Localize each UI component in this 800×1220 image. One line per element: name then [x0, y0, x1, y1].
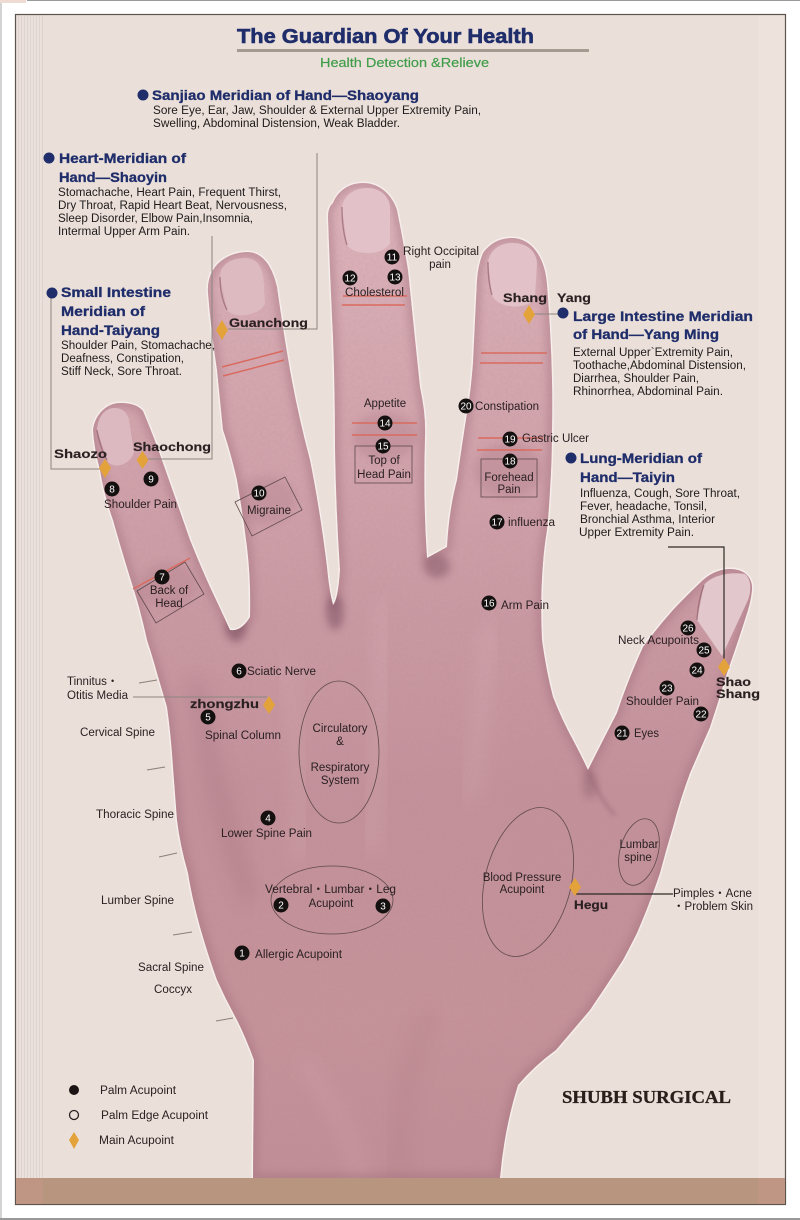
- numbered acupoints: 9: [148, 474, 154, 486]
- panel: Sanjiao meridian: [138, 87, 481, 130]
- numbered acupoints: 13: [389, 272, 401, 284]
- numbered acupoints: 18: [504, 456, 516, 468]
- acupoint labels on the hand: pain: [429, 259, 451, 271]
- spine labels: Thoracic Spine: [96, 809, 174, 821]
- panel: Small Intestine meridian: Shoulder Pain, Stomachache,: [61, 340, 215, 352]
- panel: Sanjiao meridian: Swelling, Abdominal Distension, Weak Bladder.: [153, 118, 400, 130]
- numbered acupoints: 2: [278, 900, 284, 912]
- numbered acupoints: 7: [159, 572, 165, 584]
- panel: Heart meridian: [44, 150, 287, 238]
- numbered acupoints: 4: [265, 814, 271, 824]
- panel: Small Intestine meridian: Meridian of: [61, 303, 145, 319]
- acupoint labels on the hand: spine: [624, 852, 652, 864]
- main acupoint diamonds and names: Shaozo: [54, 449, 107, 461]
- acupoint labels on the hand: Blood Pressure: [483, 872, 561, 884]
- palm highlights: [285, 660, 300, 860]
- acupoint labels on the hand: Lower Spine Pain: [221, 828, 312, 840]
- acupoint labels on the hand: Forehead: [484, 472, 534, 484]
- acupoint labels on the hand: Sciatic Nerve: [247, 666, 316, 678]
- acupoint labels on the hand: Vertebral・Lumbar・Leg: [265, 884, 396, 896]
- panel: Large Intestine meridian: Diarrhea, Shoulder Pain,: [573, 373, 699, 385]
- acupoint labels on the hand: Circulatory: [313, 723, 368, 735]
- main acupoint diamonds and names: Shaochong: [133, 442, 211, 454]
- panel: Small Intestine meridian: Deafness, Constipation,: [61, 353, 184, 365]
- brand name: SHUBH SURGICAL: [562, 1087, 731, 1107]
- panel: Small Intestine meridian: [46, 284, 215, 378]
- numbered acupoints: 16: [483, 598, 495, 610]
- numbered acupoints: 21: [616, 728, 628, 740]
- acupoint labels on the hand: System: [321, 775, 359, 787]
- spine labels: Tinnitus・: [67, 676, 118, 688]
- knuckle wrinkles: [353, 412, 417, 460]
- panel: Large Intestine meridian: of Hand—Yang Ming: [573, 326, 719, 342]
- legend: Palm Edge Acupoint: [101, 1110, 209, 1122]
- main acupoint diamonds and names: [54, 293, 760, 912]
- leader lines: [51, 153, 724, 894]
- panel: Lung meridian: Lung-Meridian of: [580, 450, 702, 466]
- acupoint labels on the hand: Acupoint: [309, 898, 354, 910]
- panel: Lung meridian: Influenza, Cough, Sore Throat,: [580, 488, 740, 500]
- numbered acupoints: 14: [379, 418, 391, 430]
- panel: Small Intestine meridian: Stiff Neck, Sore Throat.: [61, 366, 182, 378]
- acupoint labels on the hand: Constipation: [475, 401, 539, 413]
- numbered acupoints: 26: [682, 624, 694, 634]
- numbered acupoints: 1: [239, 948, 245, 960]
- acupoint labels on the hand: Eyes: [634, 728, 659, 740]
- spine tick marks: [139, 680, 233, 1021]
- acupoint labels on the hand: Shoulder Pain: [626, 696, 699, 708]
- panel: Large Intestine meridian: Rhinorrhea, Abdominal Pain.: [573, 386, 723, 398]
- acupoint labels on the hand: Gastric Ulcer: [522, 433, 589, 445]
- numbered acupoints: 25: [698, 646, 710, 656]
- acupoint labels on the hand: &: [336, 736, 344, 748]
- acupoint labels on the hand: Head Pain: [357, 469, 411, 481]
- main acupoint diamonds and names: Shang: [503, 293, 547, 305]
- numbered acupoints: 6: [236, 666, 242, 678]
- acupoint labels on the hand: ・Problem Skin: [673, 901, 753, 913]
- numbered acupoints: 12: [344, 274, 356, 284]
- numbered acupoints: [104, 250, 712, 960]
- main acupoint diamonds and names: zhongzhu: [190, 699, 259, 711]
- panel: Small Intestine meridian: Hand-Taiyang: [61, 322, 160, 338]
- acupoint labels on the hand: Pain: [497, 484, 521, 496]
- acupoint labels on the hand: Back of: [150, 585, 189, 597]
- spine labels: Lumber Spine: [101, 895, 174, 907]
- main acupoint diamonds and names: Shao: [716, 677, 751, 689]
- acupoint labels on the hand: Lumbar: [620, 839, 659, 851]
- spine labels: Coccyx: [154, 984, 192, 996]
- numbered acupoints: 3: [380, 902, 386, 912]
- title: [237, 26, 589, 70]
- panel: Lung meridian: [566, 450, 740, 539]
- numbered acupoints: 10: [253, 488, 265, 500]
- panel: Heart meridian: Heart-Meridian of: [59, 150, 186, 166]
- panel: Heart meridian: Hand—Shaoyin: [59, 169, 167, 185]
- legend: [69, 1085, 209, 1149]
- panel: Heart meridian: Dry Throat, Rapid Heart Beat, Nervousness,: [58, 200, 287, 212]
- fingernails: [97, 188, 750, 656]
- panel: Heart meridian: Stomachache, Heart Pain, Frequent Thirst,: [58, 187, 281, 199]
- web shadows: [226, 614, 246, 642]
- acupoint labels on the hand: Neck Acupoints: [618, 635, 699, 647]
- spine labels: [67, 676, 204, 996]
- acupoint labels on the hand: Spinal Column: [205, 730, 281, 742]
- panel: Large Intestine meridian: External Upper`Extremity Pain,: [573, 347, 733, 359]
- panel: Small Intestine meridian: Small Intestine: [61, 284, 171, 300]
- numbered acupoints: 15: [377, 442, 389, 452]
- panel: Large Intestine meridian: Toothache,Abdominal Distension,: [573, 360, 746, 372]
- numbered acupoints: 23: [661, 684, 673, 694]
- edge shading: [93, 183, 752, 1178]
- acupoint labels on the hand: [104, 246, 753, 961]
- panel: Heart meridian: Intermal Upper Arm Pain.: [58, 226, 190, 238]
- numbered acupoints: 22: [695, 710, 707, 720]
- numbered acupoints: 20: [460, 402, 472, 412]
- acupoint labels on the hand: Arm Pain: [501, 600, 549, 612]
- acupoint labels on the hand: Appetite: [364, 398, 406, 410]
- panel: Large Intestine meridian: Large Intestine Meridian: [573, 308, 753, 324]
- acupoint labels on the hand: Head: [155, 598, 183, 610]
- bottom band: [16, 1178, 785, 1204]
- panel: Large Intestine meridian: [558, 308, 753, 398]
- subtitle: Health Detection &Relieve: [320, 55, 489, 70]
- panel: Sanjiao meridian: Sore Eye, Ear, Jaw, Shoulder & External Upper Extremity Pain,: [153, 105, 481, 117]
- acupoint labels on the hand: Pimples・Acne: [673, 888, 752, 900]
- main acupoint diamonds and names: Guanchong: [229, 318, 308, 330]
- panel: Lung meridian: Bronchial Asthma, Interior: [580, 514, 715, 526]
- acupoint labels on the hand: Acupoint: [500, 884, 545, 896]
- numbered acupoints: 24: [691, 666, 703, 676]
- panel: Lung meridian: Fever, headache, Tonsil,: [580, 501, 707, 513]
- title: The Guardian Of Your Health: [237, 26, 534, 48]
- numbered acupoints: 17: [491, 518, 503, 528]
- reflex zone boxes: [137, 446, 666, 966]
- acupoint labels on the hand: Respiratory: [311, 762, 370, 774]
- legend: Main Acupoint: [99, 1135, 175, 1147]
- spine labels: Otitis Media: [67, 690, 129, 702]
- acupoint labels on the hand: Allergic Acupoint: [255, 949, 343, 961]
- spine labels: Sacral Spine: [138, 962, 204, 974]
- main acupoint diamonds and names: Hegu: [574, 900, 608, 912]
- acupoint labels on the hand: Shoulder Pain: [104, 499, 177, 511]
- legend: Palm Acupoint: [100, 1085, 177, 1097]
- panel: Sanjiao meridian: Sanjiao Meridian of Hand—Shaoyang: [152, 87, 419, 103]
- acupoint labels on the hand: Right Occipital: [403, 246, 479, 258]
- numbered acupoints: 19: [504, 434, 516, 446]
- numbered acupoints: 11: [387, 252, 398, 264]
- red crease lines: [133, 296, 547, 589]
- spine labels: Cervical Spine: [80, 727, 155, 739]
- acupoint labels on the hand: Top of: [368, 455, 400, 467]
- main acupoint diamonds and names: Shang: [716, 689, 760, 701]
- numbered acupoints: 8: [109, 484, 115, 496]
- numbered acupoints: 5: [205, 712, 211, 724]
- acupoint labels on the hand: influenza: [508, 517, 556, 529]
- acupoint labels on the hand: Cholesterol: [345, 287, 404, 299]
- panel: Heart meridian: Sleep Disorder, Elbow Pain,Insomnia,: [58, 213, 253, 225]
- illustration: hand: [92, 182, 754, 1178]
- acupoint labels on the hand: Migraine: [247, 505, 291, 517]
- panel: Lung meridian: Hand—Taiyin: [580, 469, 675, 485]
- panel: Lung meridian: Upper Extremity Pain.: [579, 527, 694, 539]
- main acupoint diamonds and names: Yang: [557, 293, 591, 305]
